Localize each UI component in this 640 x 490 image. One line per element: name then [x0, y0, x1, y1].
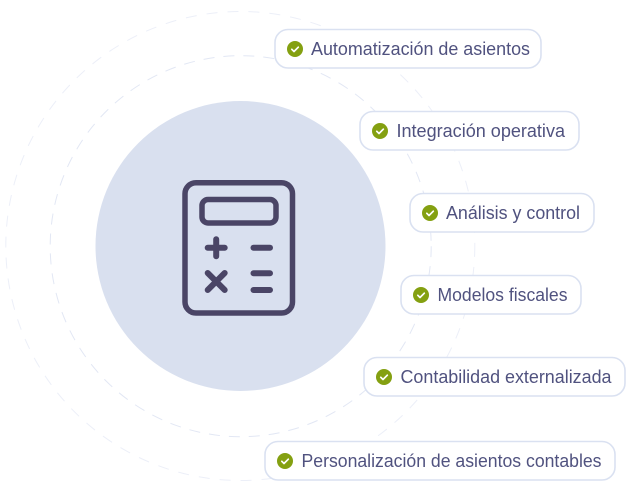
- dashed orbit: inner: [50, 56, 431, 437]
- pill: Automatización de asientos: [275, 30, 541, 68]
- pill: Contabilidad externalizada: Contabilidad externalizada: [400, 367, 612, 387]
- pill: Automatización de asientos: Automatización de asientos: [311, 39, 530, 59]
- pill: Análisis y control: [410, 194, 594, 232]
- dashed orbit: outer: [6, 12, 475, 480]
- icon: calculator: [185, 183, 292, 313]
- pill: Integración operativa: [360, 112, 579, 150]
- pill: Modelos fiscales: Modelos fiscales: [438, 285, 568, 305]
- pill: Contabilidad externalizada: [364, 358, 625, 396]
- pill: Personalización de asientos contables: Personalización de asientos contables: [302, 451, 602, 471]
- pill: Integración operativa: Integración operativa: [396, 121, 566, 141]
- pill: Modelos fiscales: [401, 276, 581, 314]
- pill: Análisis y control: Análisis y control: [446, 203, 580, 223]
- pill: Personalización de asientos contables: [265, 442, 615, 480]
- central circle: [96, 101, 386, 391]
